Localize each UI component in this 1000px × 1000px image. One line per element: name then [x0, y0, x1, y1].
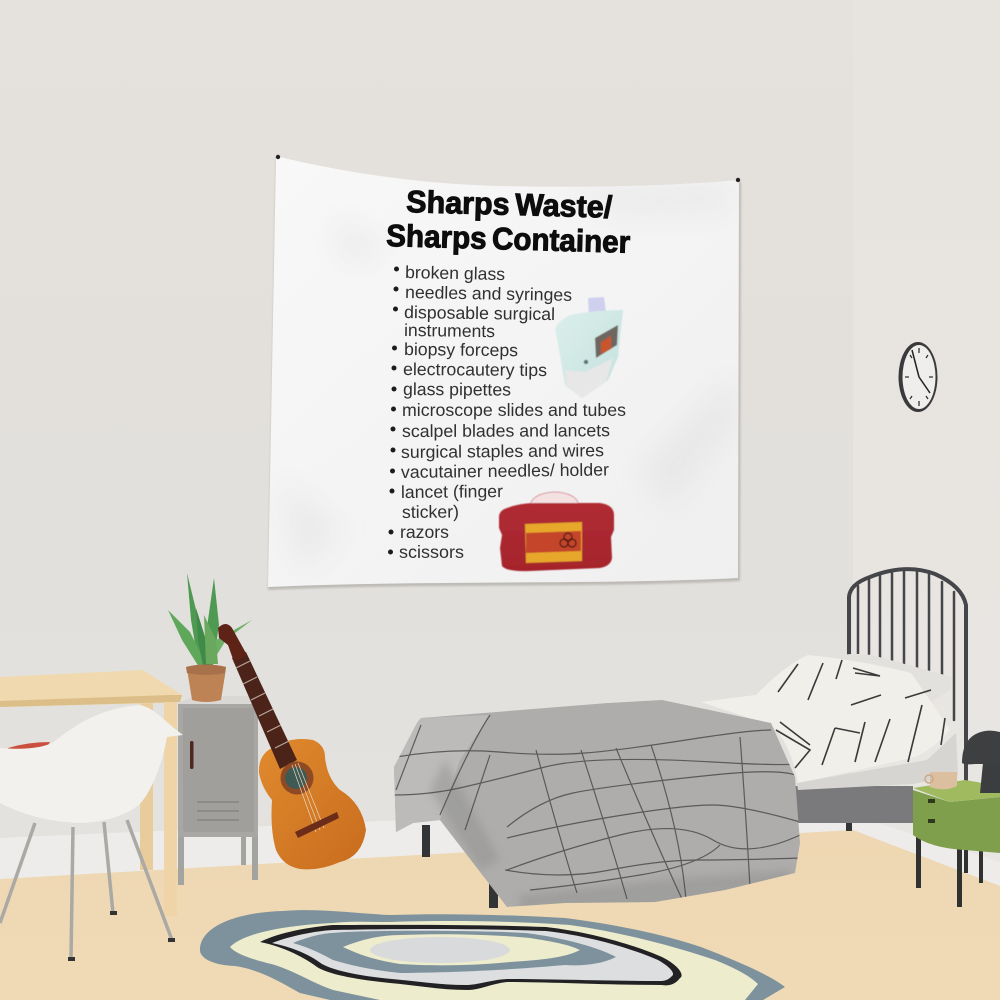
tapestry cloth: [268, 156, 739, 587]
blanket plaid lines: [394, 715, 805, 900]
back pillow: [830, 654, 952, 702]
guitar headstock: [218, 624, 247, 662]
list item: razors: [400, 522, 449, 542]
wall clock: [898, 342, 938, 412]
list item: lancet (finger: [401, 481, 503, 502]
clock hands: [912, 350, 930, 393]
mattress: [797, 733, 958, 790]
chair shell: [0, 705, 183, 823]
rug cream band: [230, 921, 758, 1000]
list item: scissors: [399, 542, 464, 562]
chair: [0, 705, 183, 961]
clock face: [902, 345, 936, 409]
chair legs: [0, 820, 172, 958]
title line 1: Sharps Waste/: [406, 184, 613, 225]
desk top: [0, 670, 182, 707]
list item: vacutainer needles/ holder: [401, 459, 609, 482]
rug inner blue: [293, 931, 616, 973]
bed: [394, 569, 966, 915]
locker legs: [178, 835, 258, 885]
locker handle: [190, 741, 194, 769]
guitar body: [259, 739, 366, 869]
rug centre: [370, 937, 510, 963]
locker door: [183, 708, 254, 832]
container lid: [588, 297, 606, 315]
list item: needles and syringes: [405, 282, 573, 305]
floor: [0, 830, 1000, 1000]
guitar strings: [292, 763, 324, 832]
lamp shade: [962, 731, 1000, 764]
rug inner cream: [343, 934, 580, 965]
title line 2: Sharps Container: [386, 218, 631, 260]
list item: sticker): [402, 502, 459, 522]
locker vents: [197, 802, 239, 820]
guitar neck: [232, 652, 297, 769]
back leg: [140, 703, 153, 870]
rug white band: [272, 929, 673, 985]
headboard: [849, 569, 966, 780]
list item: microscope slides and tubes: [402, 400, 626, 420]
chair feet: [68, 911, 175, 961]
pot rim: [186, 664, 226, 675]
bed frame: [790, 786, 913, 823]
locker cabinet: [178, 696, 258, 885]
biohazard label: [525, 522, 582, 563]
container body: [555, 310, 623, 398]
red body: [499, 503, 614, 571]
chair cushion: [8, 742, 50, 750]
guitar: [218, 624, 366, 869]
baseboard: left wall: [0, 800, 853, 880]
locker body: [178, 704, 258, 837]
list item: broken glass: [405, 262, 506, 284]
container window: [595, 325, 618, 358]
container label: [601, 336, 611, 354]
nightstand drawer handles: [928, 801, 935, 821]
blanket: [394, 700, 800, 907]
aloe leaves: [168, 573, 252, 667]
list item: disposable surgical: [404, 302, 555, 324]
bullets: [388, 266, 399, 554]
headboard bars: [858, 569, 954, 720]
container latch: [584, 360, 588, 364]
sharps list: [388, 262, 626, 562]
tapestry: [268, 155, 741, 590]
guitar bridge: [295, 812, 339, 838]
baseboard: right wall: [853, 815, 1000, 886]
mug: [925, 772, 957, 789]
label centre: [526, 531, 581, 553]
pillow pattern: [776, 660, 945, 768]
rug black line: [260, 925, 682, 990]
guitar soundhole: [285, 767, 307, 789]
biohazard symbol: [560, 533, 576, 547]
list item: electrocautery tips: [403, 359, 547, 380]
nightstand body: [913, 790, 1000, 853]
lamp base: [980, 763, 1000, 793]
clock ticks: [905, 348, 933, 406]
lamp: [962, 731, 1000, 793]
title: [386, 184, 631, 260]
rug outer blue: [200, 910, 785, 1000]
icon: red sharps container: [499, 492, 614, 571]
bed legs: [422, 815, 852, 908]
headboard frame: [849, 569, 966, 780]
front leg: [164, 702, 177, 916]
tapestry folds: [300, 422, 713, 540]
blanket light side: [394, 715, 490, 832]
terracotta pot: [186, 664, 226, 702]
rug: [200, 910, 785, 1000]
list item: instruments: [404, 320, 495, 341]
tapestry shadow: [268, 158, 741, 590]
clock rim: [898, 342, 938, 412]
aloe plant: [168, 573, 252, 702]
nightstand legs: [916, 835, 983, 907]
list item: surgical staples and wires: [401, 440, 604, 462]
pin: right: [736, 178, 740, 182]
patterned pillow: [701, 655, 950, 783]
guitar rosette: [280, 762, 314, 794]
pin: left: [276, 155, 280, 159]
guitar fret lines: [236, 661, 289, 748]
wall: right: [853, 0, 1000, 890]
list item: glass pipettes: [403, 379, 511, 400]
blanket shading: [430, 764, 790, 906]
mug handle: [925, 775, 933, 783]
locker top: [178, 696, 258, 706]
nightstand top: [913, 780, 1000, 802]
desk edge: [0, 695, 182, 707]
wall: left: [0, 0, 853, 880]
container lower body: [565, 358, 613, 398]
list item: scalpel blades and lancets: [402, 420, 610, 441]
icon: teal wall sharps container: [555, 297, 623, 398]
red lid: [530, 492, 579, 505]
nightstand: [913, 731, 1000, 907]
desk: [0, 670, 182, 916]
list item: biopsy forceps: [404, 339, 518, 360]
